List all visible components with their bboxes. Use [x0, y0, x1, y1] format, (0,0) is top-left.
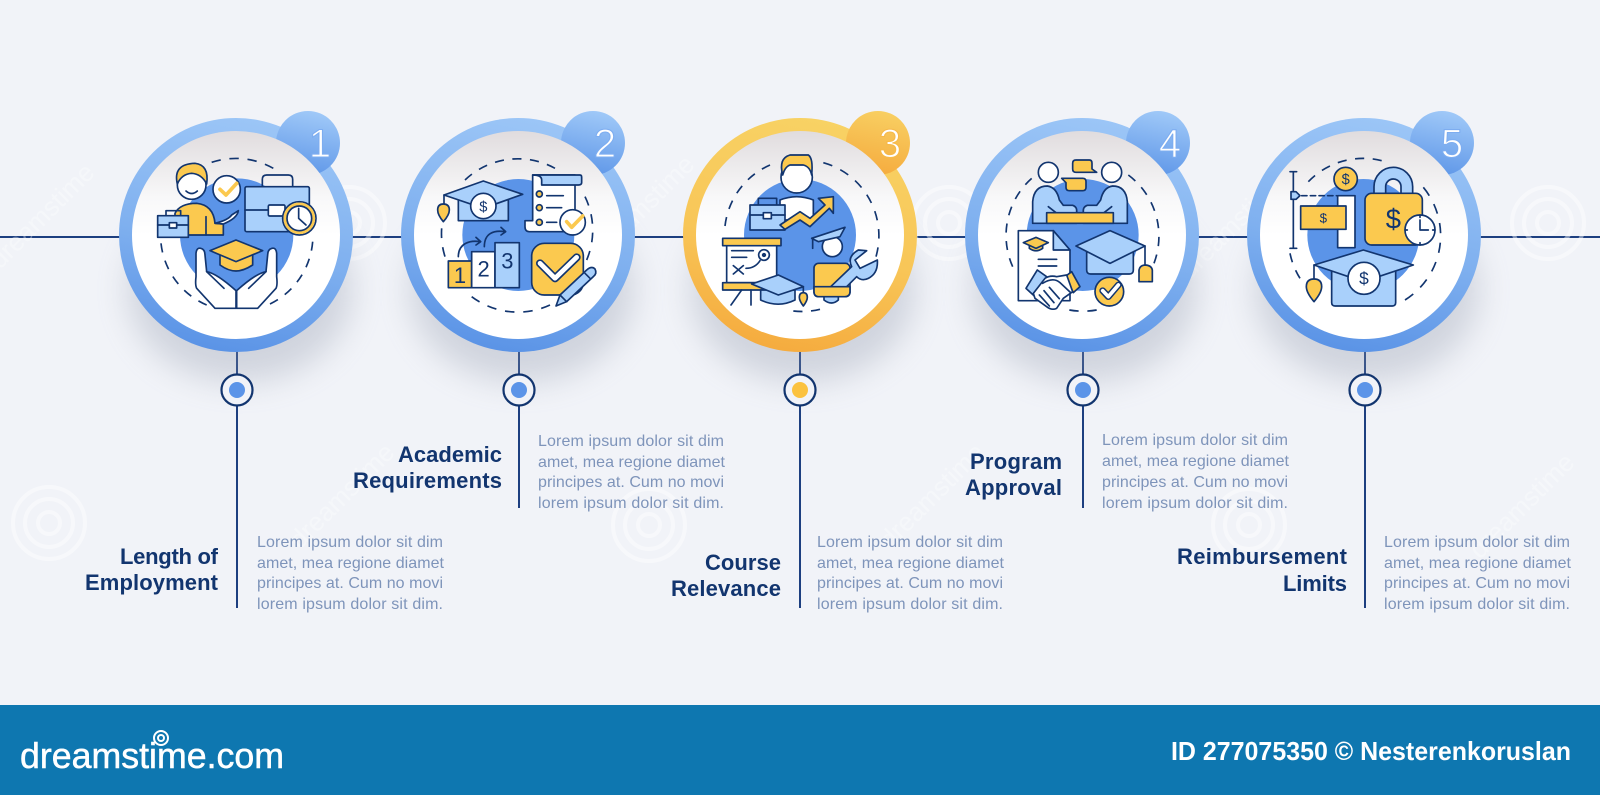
body: [1102, 432, 1290, 512]
icon: limit gauge, bill, lock, cap with dollar: $: [1320, 211, 1328, 226]
icon: limit gauge, bill, lock, cap with dollar: $: [1342, 172, 1350, 188]
step 2 text: [353, 433, 726, 512]
body: amet, mea regione diamet: [1384, 555, 1572, 572]
logo spiral icon: [154, 731, 168, 745]
heading: Academic: [398, 442, 502, 467]
icon: cap with dollar, checklist, podium, check box: 1: [454, 263, 466, 288]
body: principes at. Cum no movi: [1384, 575, 1570, 592]
icon: limit gauge, bill, lock, cap with dollar: [1290, 158, 1441, 306]
body: Lorem ipsum dolor sit dim: [538, 433, 724, 450]
icon: cap with dollar, checklist, podium, check box: 2: [478, 257, 490, 282]
body: lorem ipsum dolor sit dim.: [1102, 495, 1288, 512]
heading: Length of: [120, 544, 219, 569]
icon: employee, briefcase, clock and cap in hands: [158, 158, 316, 308]
heading: Course: [705, 550, 781, 575]
number 3: 3: [879, 122, 901, 166]
body: lorem ipsum dolor sit dim.: [257, 596, 443, 613]
step 3 text: [671, 534, 1005, 613]
heading: Program: [970, 449, 1062, 474]
number 2: 2: [594, 122, 616, 166]
heading: Reimbursement: [1177, 544, 1348, 569]
heading: Requirements: [353, 468, 502, 493]
watermark text: dreamstime: [1173, 167, 1290, 284]
step 1 badge and ring: [119, 111, 353, 382]
step 4 badge and ring: [965, 111, 1199, 382]
heading: Employment: [85, 570, 219, 595]
icon: cap with dollar, checklist, podium, check box: 3: [501, 248, 513, 273]
heading: Limits: [1283, 571, 1347, 596]
body: amet, mea regione diamet: [817, 555, 1005, 572]
step 5 marker: [1350, 374, 1380, 406]
watermark text: dreamstime: [873, 437, 990, 554]
watermark text: dreamstime: [283, 437, 400, 554]
body: amet, mea regione diamet: [257, 555, 445, 572]
heading: [85, 544, 219, 595]
body: amet, mea regione diamet: [1102, 453, 1290, 470]
body: Lorem ipsum dolor sit dim: [1384, 534, 1570, 551]
heading: [1177, 544, 1348, 596]
step 3 marker: [784, 374, 816, 406]
body: amet, mea regione diamet: [538, 454, 726, 471]
icon: employee, growth arrow, board, cap, wrench: [723, 155, 879, 311]
footer bar: [0, 705, 1600, 795]
heading: [965, 449, 1062, 500]
heading: Relevance: [671, 576, 781, 601]
body: lorem ipsum dolor sit dim.: [1384, 596, 1570, 613]
step 4 marker: [1068, 374, 1098, 406]
heading: [671, 550, 781, 601]
step 4 text: [965, 432, 1290, 512]
step 2 marker: [504, 374, 534, 406]
watermark text: [0, 149, 1580, 564]
icon: limit gauge, bill, lock, cap with dollar: $: [1386, 203, 1401, 234]
body: Lorem ipsum dolor sit dim: [257, 534, 443, 551]
step 1 text: [85, 534, 445, 613]
body: lorem ipsum dolor sit dim.: [538, 495, 724, 512]
step 5 text: [1177, 534, 1572, 613]
watermark text: dreamstime: [1463, 447, 1580, 564]
body: Lorem ipsum dolor sit dim: [817, 534, 1003, 551]
body: [257, 534, 445, 613]
number 5: 5: [1441, 122, 1463, 166]
step 1 marker: [222, 374, 252, 406]
body: lorem ipsum dolor sit dim.: [817, 596, 1003, 613]
heading: [353, 442, 502, 493]
icon: meeting, document, handshake, cap: [1006, 160, 1159, 311]
step 2 badge and ring: [401, 111, 635, 382]
image id and credit: ID 277075350 © Nesterenkoruslan: [1171, 736, 1571, 766]
logo wordmark: dreamstime.com: [20, 735, 284, 776]
step 5 badge and ring: [1247, 111, 1481, 382]
body: principes at. Cum no movi: [1102, 474, 1288, 491]
icon: limit gauge, bill, lock, cap with dollar: $: [1359, 268, 1369, 288]
step 3 badge and ring: [683, 111, 917, 382]
watermark text: dreamstime: [583, 149, 700, 266]
body: [817, 534, 1005, 613]
body: principes at. Cum no movi: [257, 575, 443, 592]
heading: Approval: [965, 475, 1062, 500]
number 4: 4: [1159, 122, 1181, 166]
body: principes at. Cum no movi: [817, 575, 1003, 592]
number 1: 1: [309, 122, 331, 166]
body: [538, 433, 726, 512]
timeline axis: [0, 237, 1600, 608]
body: Lorem ipsum dolor sit dim: [1102, 432, 1288, 449]
icon: cap with dollar, checklist, podium, check box: $: [479, 199, 487, 215]
watermark spirals: [13, 187, 1584, 561]
icon: cap with dollar, checklist, podium, check box: [438, 159, 596, 312]
body: principes at. Cum no movi: [538, 474, 724, 491]
body: [1384, 534, 1572, 613]
